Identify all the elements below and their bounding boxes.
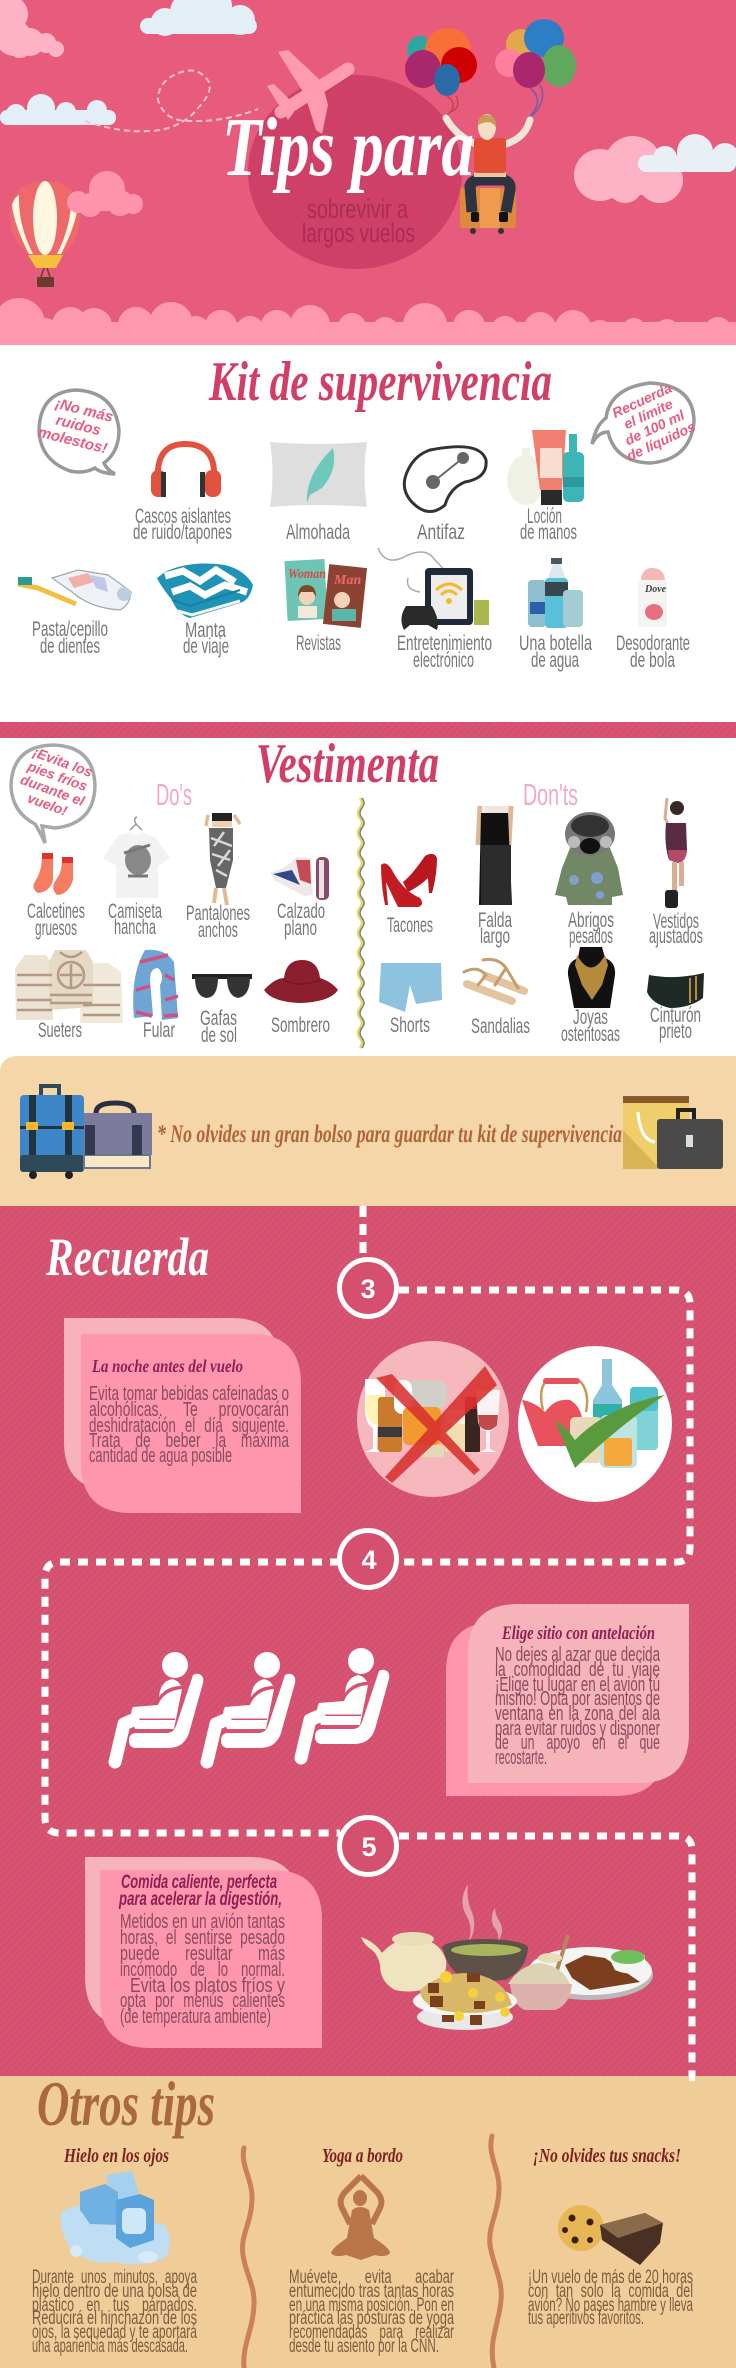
card text [495, 1644, 661, 1769]
card text: No dejes al azar que decida [495, 1644, 661, 1666]
icon: electronics [378, 548, 489, 630]
icon: hot food [361, 1884, 653, 2030]
label: Antifaz: Antifaz [417, 521, 465, 544]
card text: ¡Elige tu lugar en el avión tú [495, 1674, 660, 1696]
icon: belt [647, 973, 704, 1008]
card title: Elige sitio con antelación [501, 1623, 655, 1644]
tip title: yoga: Yoga a bordo [322, 2145, 403, 2167]
tip text: ice: ojos, la sequedad y te aportará [32, 2322, 197, 2343]
card text: Evita tomar bebidas cafeinadas o [89, 1383, 289, 1405]
icon: deodorant: Dove [644, 584, 667, 595]
tip text: snacks: tus aperitivos favoritos. [528, 2308, 644, 2329]
tip title: snacks: ¡No olvides tus snacks! [533, 2145, 681, 2167]
decorative circle [248, 75, 462, 269]
label: Gafas: Gafas [200, 1007, 237, 1030]
divider [358, 798, 364, 1048]
icon: blue suitcase [20, 1086, 84, 1179]
icon: heavy coat [555, 812, 623, 905]
heading: Otros tips: Otros tips [37, 2068, 215, 2139]
card text [89, 1383, 290, 1467]
seat 1 [115, 1652, 203, 1762]
icon: flat shoes [270, 857, 329, 900]
card text: opta por menús calientes [120, 1990, 285, 2012]
icon: hot air balloon [10, 181, 80, 287]
label: Calcetines: Calcetines [27, 900, 85, 923]
icon: shorts [379, 963, 442, 1012]
step 4 [340, 1530, 396, 1588]
callout: cold feet: pies fríos [25, 758, 90, 794]
step 3 [340, 1260, 396, 1316]
tip text: ice: Durante unos minutos, apoya [32, 2267, 197, 2288]
label: Locion [520, 505, 577, 544]
callout: liquids limit: Recuerda [610, 379, 674, 421]
tip text: ice: Reducirá el hinchazón de los [32, 2308, 197, 2329]
label: Calzado: plano [284, 917, 317, 940]
card text: incómodo de lo normal. [120, 1959, 285, 1981]
label: Cinturon [650, 1004, 701, 1043]
label: Calcetines: gruesos [35, 917, 77, 940]
green check [555, 1395, 665, 1468]
panel: survival kit [0, 345, 736, 722]
label: Cascos: de ruido/tapones [133, 521, 232, 544]
callout: no noise [36, 390, 119, 474]
callout: cold feet [11, 743, 98, 843]
card text: Evita los platos fríos y [130, 1975, 285, 1997]
cloud: right pink [574, 136, 683, 203]
label: Pantalones: anchos [198, 919, 238, 942]
tip text: ice [32, 2267, 197, 2357]
icon: pillow [270, 442, 367, 507]
card text: cantidad de agua posible [89, 1445, 232, 1467]
icon: scarf [133, 950, 178, 1020]
cloud: pink by balloon [67, 171, 143, 217]
icon: magazines: Man [333, 573, 361, 588]
tip text: yoga: práctica las posturas de yoga [289, 2308, 454, 2329]
card text: (de temperatura ambiente) [120, 2006, 271, 2028]
heading: Kit de supervivencia: Kit de supervivencia [208, 351, 552, 413]
tip text: yoga: Muévete, evita acabar [289, 2267, 454, 2288]
icon: headphones [151, 444, 221, 497]
label: Joyas [561, 1006, 620, 1046]
icon: purple case [84, 1103, 152, 1168]
label: Manta: de viaje [183, 635, 229, 658]
label: Gafas [200, 1007, 237, 1047]
label: Shorts: Shorts [390, 1014, 430, 1037]
label: Gafas: de sol [201, 1024, 237, 1047]
card text: Metidos en un avión tantas [120, 1911, 285, 1933]
icon: sleep mask [404, 447, 486, 512]
label: Cinturon: Cinturón [650, 1004, 701, 1027]
card title [118, 1872, 282, 1910]
seat 3 [301, 1648, 389, 1758]
dashed route [45, 1206, 692, 2076]
icon: magazines [284, 559, 367, 628]
tip text: yoga [289, 2267, 454, 2357]
callout: cold feet: vuelo! [25, 790, 70, 819]
label: Botella: de agua [531, 649, 579, 672]
icon: t-shirt [103, 817, 170, 898]
icon: socks [33, 853, 73, 895]
icon: plane [267, 50, 348, 134]
label: Pantalones: Pantalones [186, 902, 250, 925]
icon: yellow bag [623, 1096, 689, 1169]
label: Manta [183, 619, 229, 658]
label: Vestidos: Vestidos [653, 910, 699, 933]
label: Desodorante: de bola [630, 649, 675, 672]
icon: suitcase seat [460, 188, 516, 234]
callout: no noise: ruidos [54, 412, 103, 439]
icon: tight dress [665, 798, 687, 908]
heading: Don'ts: Don'ts [523, 777, 578, 812]
icon: long skirt [478, 806, 512, 905]
subtitle: sobrevivir a [307, 194, 409, 224]
card text: ventana en la zona del ala [495, 1703, 661, 1725]
label: Falda: Falda [478, 909, 512, 932]
label: Pantalones [186, 902, 250, 942]
label: Entretenimiento [397, 632, 492, 672]
callout: cold feet: durante el [18, 771, 88, 809]
icon: magazines: Woman [288, 567, 326, 582]
label: Desodorante [616, 632, 690, 672]
panel: hero [0, 0, 736, 350]
icon: deodorant [638, 568, 667, 627]
band [0, 722, 736, 738]
label: Locion: Loción [527, 505, 562, 528]
callout: no noise: molestos! [36, 424, 109, 457]
seat 2 [207, 1652, 295, 1762]
tip text: yoga: desde tu asiento por la CNN. [289, 2336, 439, 2357]
label: Fular: Fular [143, 1019, 175, 1042]
label: Botella [519, 632, 592, 672]
icon: hat [264, 960, 338, 1003]
icon: blanket [157, 564, 253, 618]
label: Abrigos: Abrigos [568, 909, 614, 932]
card: night before [64, 1318, 301, 1513]
title: Tips para [222, 101, 474, 194]
divider 1 [242, 2148, 254, 2368]
card text [120, 1911, 285, 2028]
label: Pasta: de dientes [40, 635, 100, 658]
tip title: ice: Hielo en los ojos [63, 2145, 169, 2167]
icon: toothbrush and paste [18, 570, 131, 610]
label: Falda [478, 909, 512, 948]
label: Entretenimiento: Entretenimiento [397, 632, 492, 655]
label: Falda: largo [480, 925, 510, 948]
divider 2 [490, 2136, 501, 2368]
icon: ice [60, 2171, 170, 2264]
dashed flight path [85, 70, 258, 131]
label: Cinturon: prieto [659, 1020, 692, 1043]
label: Calzado [277, 900, 325, 940]
icon: sandals [464, 959, 524, 1001]
tip text: ice: hielo dentro de una bolsa de [32, 2281, 197, 2302]
label: Joyas: ostentosas [561, 1023, 620, 1046]
step 5 [340, 1818, 396, 1874]
cloud: left white [0, 94, 116, 125]
icon: sunglasses [192, 974, 252, 998]
icon: snacks [558, 2205, 663, 2265]
icon: yes water [518, 1346, 672, 1502]
red cross [376, 1366, 497, 1483]
panel: clothing [0, 733, 736, 1056]
tip text: yoga: entumecido tras tantas horas [289, 2281, 454, 2302]
card text: alcohólicas. Te provocarán [89, 1399, 289, 1421]
tip text: yoga: en una misma posición. Pon en [289, 2295, 454, 2316]
callout: liquids limit: el límite [621, 395, 675, 432]
card text: puede resultar más [120, 1943, 285, 1965]
label: Camiseta [108, 900, 162, 939]
label: Almohada: Almohada [286, 521, 350, 544]
card text: horas, el sentirse pesado [120, 1927, 285, 1949]
label: Calzado: Calzado [277, 900, 325, 923]
label: Tacones: Tacones [387, 914, 433, 937]
callout: cold feet: ¡Evita los [31, 744, 95, 780]
card: hot food [85, 1857, 322, 2048]
panel: bag reminder [0, 1056, 736, 1206]
card text: recostarte. [495, 1747, 547, 1769]
card title: para acelerar la digestión, [118, 1889, 282, 1910]
tip text: snacks [528, 2267, 693, 2329]
icon: heels [381, 854, 437, 907]
step 3: 3 [360, 1274, 376, 1304]
icon: necklace [568, 947, 615, 1008]
label: Calcetines [27, 900, 85, 940]
card text: deshidratación el día siguiente. [89, 1415, 289, 1437]
label: Camiseta: Camiseta [108, 900, 162, 923]
label: Abrigos: pesados [569, 925, 613, 948]
card: choose seat [446, 1604, 689, 1796]
icon: balloons left [405, 28, 477, 116]
tip text: ice: una apariencia más descasada. [32, 2336, 188, 2357]
label: Abrigos [568, 909, 614, 948]
cloud: top left pink [0, 0, 64, 58]
subtitle [302, 194, 415, 248]
icon: water bottles [528, 558, 583, 628]
icon: balloons right [495, 19, 576, 116]
pink cloud band [0, 298, 736, 350]
card title: La noche antes del vuelo [91, 1356, 243, 1376]
card text: Trata de beber la máxima [89, 1430, 290, 1452]
heading: Vestimenta: Vestimenta [256, 733, 439, 795]
tip text: ice: plástico en tus párpados. [32, 2295, 197, 2316]
label: Entretenimiento: electrónico [413, 649, 474, 672]
step 4: 4 [361, 1545, 377, 1575]
panel: remember [0, 1206, 736, 2076]
icon: seats [115, 1648, 389, 1762]
callout: no noise: ¡No más [53, 395, 115, 426]
icon: wide trousers [206, 813, 240, 905]
label: Pasta: Pasta/cepillo [32, 618, 108, 641]
subtitle: largos vuelos [302, 218, 415, 248]
card title: Comida caliente, perfecta [121, 1872, 277, 1893]
heading: Do's: Do's [156, 777, 192, 812]
cloud: top white [140, 0, 257, 36]
tip text: yoga: recomendadas para realizar [289, 2322, 454, 2343]
label: Sandalias: Sandalias [471, 1015, 530, 1038]
icon: sweaters [15, 950, 123, 1023]
cloud: right white [638, 134, 736, 172]
label: Sueters: Sueters [38, 1019, 82, 1042]
icon: traveller [446, 114, 530, 222]
label: Vestidos [649, 910, 703, 948]
label: Cascos: Cascos aislantes [135, 505, 231, 528]
label: Camiseta: hancha [114, 916, 156, 939]
icon: yoga [331, 2176, 390, 2260]
route end [689, 2076, 695, 2081]
callout: liquids limit [592, 377, 698, 464]
label: Manta: Manta [185, 619, 226, 642]
icon: no alcohol [357, 1341, 509, 1497]
step 5: 5 [361, 1832, 377, 1862]
card text: la comodidad de tu viaje [495, 1659, 660, 1681]
label: Cascos [133, 505, 232, 544]
label: Desodorante: Desodorante [616, 632, 690, 655]
callout: liquids limit: de 100 ml [622, 406, 688, 448]
heading: Recuerda: Recuerda [45, 1227, 209, 1287]
callout: liquids limit: de líquidos [624, 418, 698, 464]
icon: hand lotion [507, 430, 584, 505]
label: Revistas: Revistas [296, 632, 341, 655]
panel: other tips [0, 2068, 736, 2368]
label: Botella: Una botella [519, 632, 592, 655]
label: Locion: de manos [520, 521, 577, 544]
label: Joyas: Joyas [573, 1006, 608, 1029]
label: Sombrero: Sombrero [271, 1014, 330, 1037]
label: Pasta [32, 618, 108, 658]
icon: black briefcase [657, 1110, 723, 1169]
